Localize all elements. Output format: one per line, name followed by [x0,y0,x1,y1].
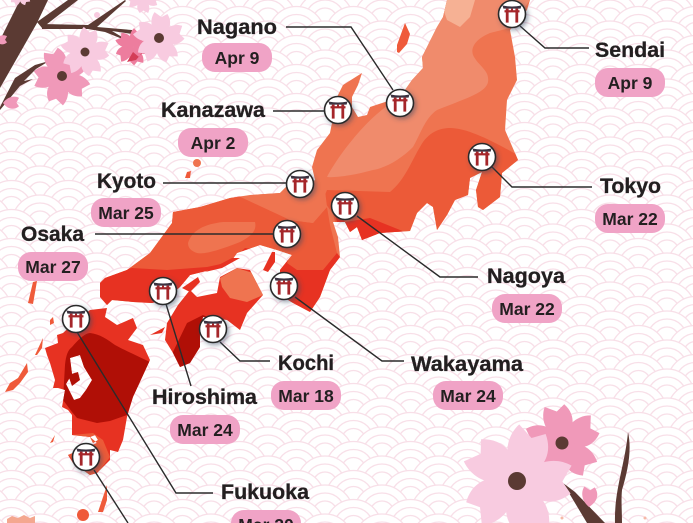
city label: Hiroshima: Mar 24 [177,420,233,440]
Shikoku [165,268,263,367]
city label: Wakayama: Wakayama [411,353,523,376]
city label: Nagano: Nagano [197,16,277,39]
Shimabara peninsula [68,372,80,386]
marker: Kyoto [286,170,314,198]
city label: Hiroshima: Hiroshima [152,386,257,409]
city label: Kyoto: Kyoto [97,170,156,193]
map of Japan with bloom-date zones [5,0,530,521]
city label: Nagoya: Nagoya [487,265,565,288]
city label: Kochi [271,352,341,410]
marker: Sendai [498,0,526,28]
branches [0,0,48,88]
city label: Sendai: Sendai [595,39,665,62]
Sado, Oki and southern islands [5,23,410,512]
marker: Kanazawa [324,96,352,124]
city label: Sendai: Apr 9 [608,73,653,93]
city label: Nagano: Apr 9 [215,48,260,68]
Awaji and Seto islands [150,252,275,335]
torii markers [62,0,526,470]
city label: Fukuoka: Fukuoka [221,481,309,504]
city label: Kochi: Kochi [278,352,334,375]
marker: Nagano [386,90,414,116]
city label: Kanazawa: Kanazawa [161,99,265,122]
city label: Nagano [197,16,277,72]
city label: Nagoya [487,265,565,323]
city label: Kochi: Mar 18 [278,386,334,406]
city label: Kyoto: Mar 25 [98,203,154,223]
faint flower peek: bottom left [7,515,35,523]
city label: Kyoto [91,170,161,227]
marker: Osaka [274,220,300,248]
city label: Nagoya: Mar 22 [499,299,555,319]
blossoms [581,486,598,508]
blossoms [24,40,100,114]
branches [563,483,605,523]
Kyushu [45,308,150,475]
city label: Osaka: Mar 27 [25,257,81,277]
city label: Tokyo [595,175,665,233]
leader lines [77,26,592,523]
marker: Kagoshima [72,444,100,470]
marker: Fukuoka [62,306,90,332]
city label: Wakayama [411,353,523,410]
city label: Hiroshima [152,386,257,444]
flower cluster: bottom right [443,400,646,523]
marker: Wakayama [270,272,298,300]
marker: Hiroshima [150,278,176,304]
marker: Kochi [200,316,226,342]
city label: Fukuoka [221,481,309,523]
city label: Kanazawa: Apr 2 [191,133,236,153]
flower cluster: top left [0,0,189,114]
city label: Wakayama: Mar 24 [440,386,496,406]
city label: Osaka: Osaka [21,223,84,246]
Honshu [100,0,530,312]
city label: Tokyo: Mar 22 [602,209,658,229]
city label: Sendai [595,39,665,97]
city label: Tokyo: Tokyo [600,175,661,198]
city label: Kanazawa [161,99,265,157]
marker: Tokyo [468,144,496,170]
city label: Osaka [18,223,88,281]
marker: Nagoya [332,192,358,220]
